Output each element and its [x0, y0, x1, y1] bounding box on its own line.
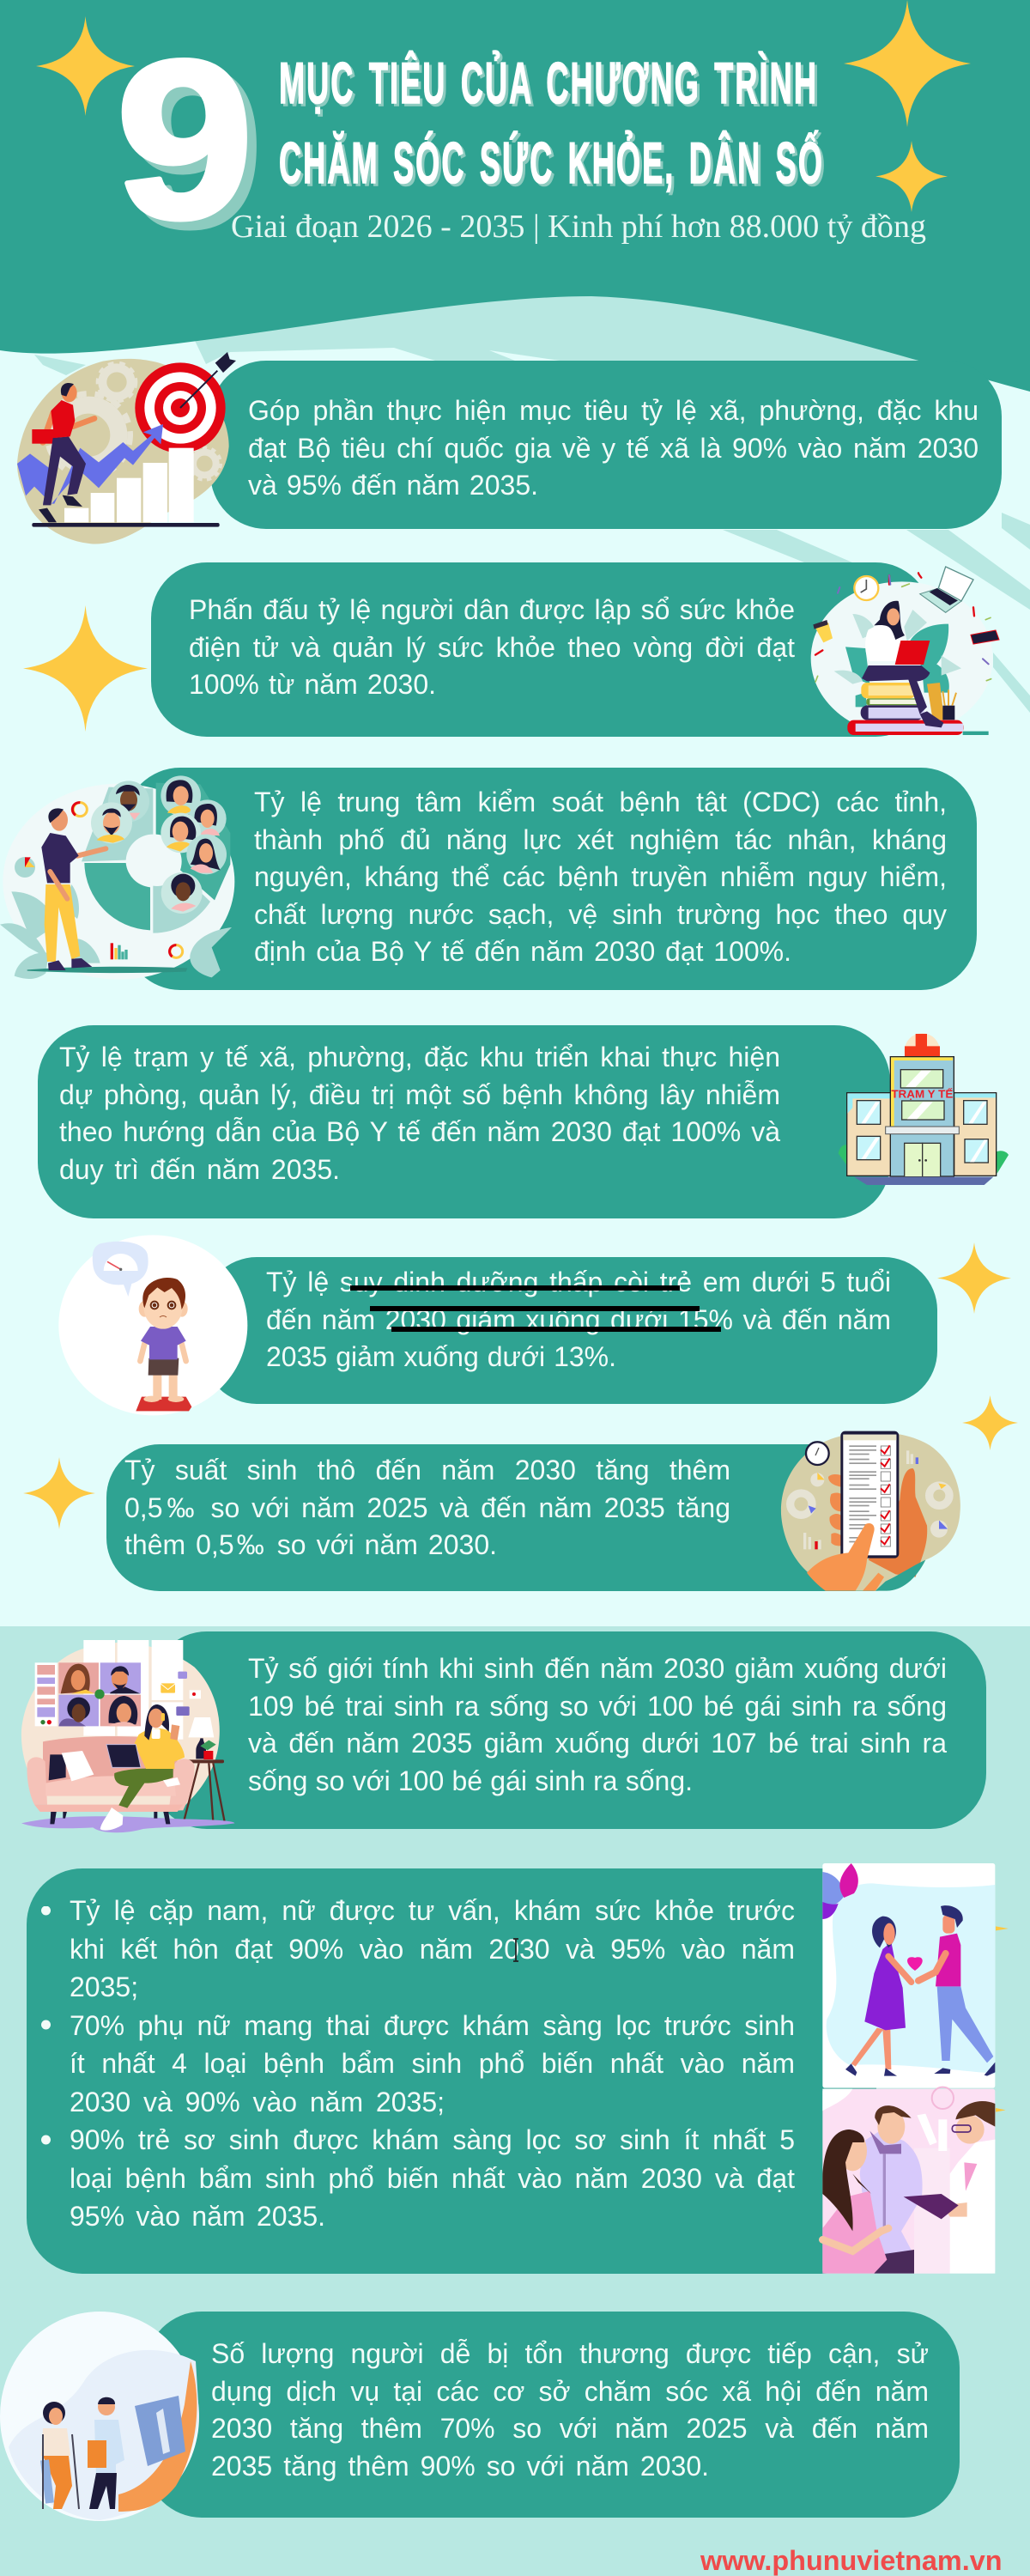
- phone and confetti: [815, 573, 999, 682]
- text: goal 9: 2030 tăng thêm 70% so với năm 2025 và đến năm: [211, 2413, 929, 2444]
- panel: goal 4: [38, 1025, 890, 1218]
- pointing hand: [807, 1523, 875, 1591]
- illustration: runner reaching target: [17, 352, 236, 544]
- text: goal 5: [266, 1267, 891, 1372]
- text: goal 4: theo hướng dẫn của Bộ Y tế đến năm 2030 đạt 100% và: [59, 1116, 780, 1147]
- panel: goal 9: [146, 2312, 960, 2518]
- text: goal 8 bullet list: 70% phụ nữ mang thai được khám sàng lọc trước sinh: [70, 2009, 795, 2040]
- text: goal 4: dự phòng, quản lý, điều trị một số bệnh không lây nhiễm: [59, 1078, 780, 1109]
- growth arrow: [17, 424, 163, 504]
- bars: [64, 448, 194, 522]
- doctor: [950, 2140, 995, 2274]
- illustration: child on scale: [58, 1235, 247, 1415]
- small charts: [791, 1485, 949, 1515]
- star fragments: [996, 1926, 1009, 2112]
- text: goal 3: Tỷ lệ trung tâm kiểm soát bệnh tật (CDC) các tỉnh,: [254, 787, 947, 817]
- icon: star left of goal 6: [23, 1457, 95, 1529]
- purple floor: [21, 1816, 234, 1832]
- text: goal 2: 100% từ năm 2030.: [189, 669, 436, 700]
- man: [937, 1986, 993, 2063]
- text: goal 3: thành phố đủ năng lực xét nghiệm tác nhân, kháng: [254, 824, 947, 855]
- text: goal 1: đạt Bộ tiêu chí quốc gia về y tế xã là 90% vào năm 2030: [248, 433, 978, 464]
- text: goal 8 bullet list: 2035;: [70, 1971, 138, 2002]
- x-ray: [135, 2396, 185, 2466]
- icon: star top left: [36, 16, 135, 116]
- panel: goal 2: [151, 562, 931, 737]
- card corner: [876, 1560, 925, 1591]
- door: [905, 1143, 941, 1177]
- woman: [862, 601, 943, 727]
- boy: [139, 1278, 188, 1402]
- man: [41, 808, 106, 970]
- woman on call: [100, 1704, 185, 1831]
- text: goal 6: 0,5‰ so với năm 2025 và đến năm 2035 tăng: [124, 1492, 730, 1523]
- text: goal 2: điện tử và quản lý sức khỏe theo vòng đời đạt: [189, 632, 795, 663]
- text: goal 4: Tỷ lệ trạm y tế xã, phường, đặc khu triển khai thực hiện: [59, 1042, 780, 1072]
- subtitle: Giai đoạn 2026 - 2035 | Kinh phí hơn 88.000 tỷ đồng: [231, 209, 926, 245]
- video call grid: [35, 1662, 141, 1726]
- clock: [806, 1442, 829, 1465]
- leaves: [0, 884, 232, 979]
- text: goal 9: Số lượng người dễ bị tổn thương được tiếp cận, sử: [211, 2338, 929, 2369]
- icon: star right of goal 5: [937, 1242, 1011, 1314]
- text: goal 9: [211, 2338, 929, 2482]
- text: goal 3: định của Bộ Y tế đến năm 2030 đạt 100%.: [254, 936, 791, 967]
- windows: [857, 1070, 988, 1163]
- text: goal 2: Phấn đấu tỷ lệ người dân được lập sổ sức khỏe: [189, 594, 795, 625]
- text: goal 5: đến năm 2030 giảm xuống dưới 15% và đến năm: [266, 1303, 891, 1334]
- text: goal 8 bullet list: [70, 1895, 795, 2232]
- text: goal 8 bullet list: khi kết hôn đạt 90% vào năm 2030 và 95% vào năm: [70, 1934, 795, 1965]
- notification icons: [161, 1672, 201, 1716]
- scale: [136, 1397, 191, 1411]
- text: goal 7: 109 bé trai sinh ra sống so với 100 bé gái sinh ra sống: [248, 1690, 947, 1721]
- text: goal 4: duy trì đến năm 2035.: [59, 1154, 340, 1185]
- sign: TRẠM Y TẾ: [891, 1088, 953, 1101]
- panel: goal 6: [106, 1444, 926, 1591]
- text: goal 2: [189, 594, 795, 700]
- text: goal 7: [248, 1653, 948, 1796]
- text: goal 6: thêm 0,5‰ so với năm 2030.: [124, 1529, 497, 1560]
- doctor: [88, 2397, 124, 2509]
- illustration: woman with laptop on books: [810, 566, 1000, 735]
- panel: goal 1: [210, 361, 1002, 529]
- text: goal 1: Góp phần thực hiện mục tiêu tỷ lệ xã, phường, đặc khu: [248, 395, 978, 426]
- sofa: [27, 1736, 195, 1824]
- flying laptop: [920, 567, 973, 612]
- illustration: commune health station: [838, 1033, 1009, 1185]
- text: goal 6: [124, 1455, 730, 1560]
- illustration: woman on video call: [21, 1640, 235, 1832]
- panel: goal 3: [124, 768, 977, 990]
- text: goal 1: [248, 395, 978, 501]
- woman: [851, 2028, 891, 2069]
- icon: star top right large: [844, 0, 971, 127]
- text: goal 7: sống so với 100 bé gái sinh ra sống.: [248, 1765, 693, 1796]
- text: goal 8 bullet list: loại bệnh bẩm sinh phổ biến nhất vào năm 2030 và đạt: [70, 2162, 795, 2193]
- list bullets and cursor mark: [41, 1906, 518, 2145]
- strike lines over goal 5 text: [350, 1285, 721, 1332]
- photo: prenatal visit: [822, 2087, 995, 2274]
- icon: small star right: [962, 1395, 1018, 1450]
- icon: star beside goal 2: [23, 605, 148, 732]
- text: goal 8 bullet list: Tỷ lệ cặp nam, nữ được tư vấn, khám sức khỏe trước: [70, 1895, 795, 1926]
- photo: couple: [822, 1863, 995, 2088]
- clock: [854, 576, 878, 600]
- runner: [32, 383, 94, 522]
- text: goal 1: và 95% đến năm 2035.: [248, 470, 538, 501]
- panel: goal 8: [27, 1868, 876, 2274]
- tablet: [904, 2194, 959, 2219]
- donut chart: [82, 783, 230, 933]
- books: [847, 683, 963, 735]
- phone: [840, 1431, 899, 1558]
- speech bubble: [93, 1242, 148, 1297]
- text: goal 9: dụng dịch vụ tại các cơ sở chăm sóc xã hội đến năm: [211, 2375, 929, 2406]
- windows: [83, 1640, 183, 1740]
- holding hand: [828, 1468, 927, 1577]
- text: goal 7: Tỷ số giới tính khi sinh đến năm 2030 giảm xuống dưới: [248, 1653, 947, 1684]
- text: goal 8 bullet list: 95% vào năm 2035.: [70, 2201, 325, 2232]
- text: goal 5: 2035 giảm xuống dưới 13%.: [266, 1341, 616, 1372]
- target: [135, 352, 236, 453]
- title: [279, 50, 824, 196]
- faces: [91, 775, 227, 914]
- text: goal 8 bullet list: ít nhất 4 loại bệnh bẩm sinh phổ biến nhất vào năm: [70, 2048, 795, 2079]
- text: goal 7: và đến năm 2035 giảm xuống dưới 107 bé trai sinh ra: [248, 1728, 947, 1759]
- gears: [47, 363, 221, 480]
- text: goal 8 bullet list: 2030 và 90% vào năm 2035;: [70, 2087, 445, 2117]
- man: [860, 2131, 923, 2274]
- illustration: couple and prenatal photos: [819, 1863, 1009, 2274]
- orange band: [118, 2361, 197, 2512]
- panel: goal 7: [151, 1631, 986, 1829]
- icon: star top right small: [876, 141, 948, 212]
- illustration: phone checklist: [781, 1431, 960, 1591]
- text: goal 3: [254, 787, 947, 967]
- illustration: man presenting people chart: [0, 775, 235, 979]
- leaves: [845, 624, 949, 707]
- illustration: care for vulnerable people: [0, 2312, 199, 2521]
- text: goal 6: Tỷ suất sinh thô đến năm 2030 tăng thêm: [124, 1455, 730, 1485]
- text: goal 4: [59, 1042, 781, 1185]
- panel: goal 5: [203, 1257, 937, 1404]
- small charts: [15, 803, 183, 959]
- text: goal 5: Tỷ lệ suy dinh dưỡng thấp còi trẻ em dưới 5 tuổi: [266, 1267, 891, 1297]
- text: goal 3: nguyên, kháng thể các bệnh truyền nhiễm nguy hiểm,: [254, 861, 947, 892]
- footer: source website: www.phunuvietnam.vn: [700, 2545, 1003, 2576]
- text: goal 3: chất lượng nước sạch, vệ sinh trường học theo quy: [254, 898, 947, 929]
- woman: [822, 2191, 887, 2274]
- text: goal 9: 2035 tăng thêm 90% so với năm 2030.: [211, 2451, 709, 2482]
- coffee cup: [813, 620, 833, 642]
- patient: [41, 2402, 79, 2509]
- text: goal 8 bullet list: 90% trẻ sơ sinh được khám sàng lọc sơ sinh ít nhất 5: [70, 2124, 795, 2155]
- lamp and table: [184, 1717, 225, 1822]
